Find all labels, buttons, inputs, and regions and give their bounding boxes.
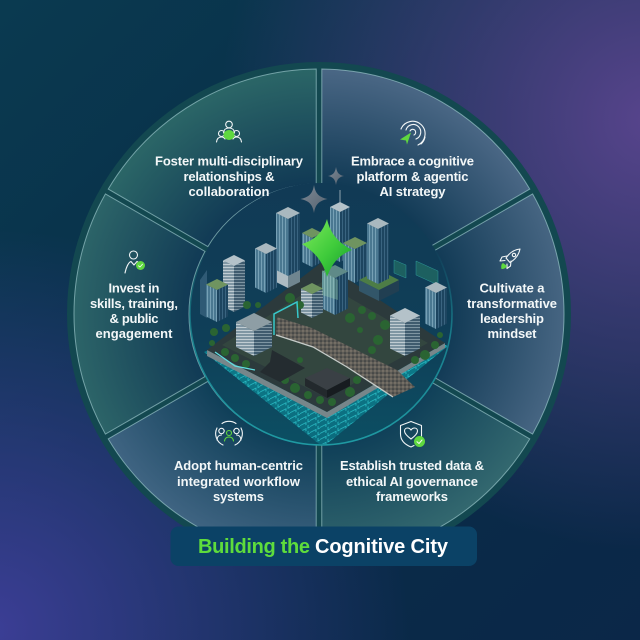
text: skills and training (90, 280, 178, 341)
text: skills and training: engagement (96, 326, 173, 341)
glass light beam under star (322, 270, 338, 300)
panel: transformative leadership segment (379, 194, 637, 463)
title text: Building the (198, 536, 310, 558)
panel: foster relationships segment (108, 9, 366, 278)
front right white building (390, 308, 420, 356)
title banner (170, 526, 477, 566)
panel: skills and training segment (1, 165, 259, 434)
text: cognitive platform: AI strategy (380, 184, 446, 199)
street trees (209, 293, 443, 406)
front parking structure (305, 368, 350, 398)
teal walkway (215, 352, 255, 370)
text: foster collaboration: collaboration (188, 184, 270, 199)
text: skills and training: & public (110, 311, 158, 326)
text: data governance (340, 458, 484, 504)
icon: rocket (500, 249, 520, 269)
city platform ground (207, 262, 445, 418)
text: human-centric workflows: Adopt human-centric (174, 458, 303, 473)
text: transformative leadership (467, 280, 557, 341)
text: human-centric workflows (174, 458, 303, 504)
title text: Cognitive City (315, 536, 449, 558)
back row buildings (200, 190, 399, 322)
small grey sparkle (328, 167, 344, 185)
wheel outer band (67, 62, 571, 566)
crowded bridge (274, 302, 415, 397)
text: data governance: Establish trusted data & (340, 458, 484, 473)
teal circuit water below the city (204, 344, 447, 444)
text: transformative leadership: Cultivate a (480, 280, 545, 296)
large grey sparkle (300, 185, 328, 213)
central hub circle (190, 183, 452, 445)
digital signs (394, 260, 438, 285)
icon: shield with heart and check (400, 422, 425, 447)
text: foster collaboration: relationships & (184, 169, 274, 184)
panel: workflow systems segment (108, 381, 316, 559)
icon: person with check badge (125, 251, 145, 273)
text: human-centric workflows: systems (213, 489, 264, 504)
front left office building (236, 313, 272, 356)
text: cognitive platform (351, 154, 474, 199)
text: skills and training: skills, training, (90, 296, 178, 311)
icon: target with arrow (400, 121, 425, 145)
green star (302, 219, 352, 277)
text: transformative leadership: mindset (488, 326, 537, 341)
text: transformative leadership: leadership (480, 311, 544, 326)
road and parking (260, 350, 305, 382)
text: cognitive platform: platform & agentic (356, 169, 468, 184)
isometric city illustration (200, 190, 448, 447)
icon: people in a cycle (216, 421, 242, 445)
middle row buildings (301, 265, 447, 329)
text: transformative leadership: transformative (467, 296, 557, 311)
text: data governance: ethical AI governance (346, 474, 478, 489)
panel: data governance segment (272, 350, 530, 619)
text: skills and training: Invest in (108, 280, 160, 296)
text: cognitive platform: Embrace a cognitive (351, 154, 474, 168)
text: foster collaboration: Foster multi-disciplinary (155, 154, 304, 168)
title text (198, 536, 449, 558)
text: human-centric workflows: integrated workflow (177, 474, 301, 489)
icon: team around table (216, 121, 242, 142)
panel: cognitive platform segment (322, 69, 530, 247)
text: foster collaboration (155, 154, 304, 199)
text: data governance: frameworks (376, 489, 448, 504)
